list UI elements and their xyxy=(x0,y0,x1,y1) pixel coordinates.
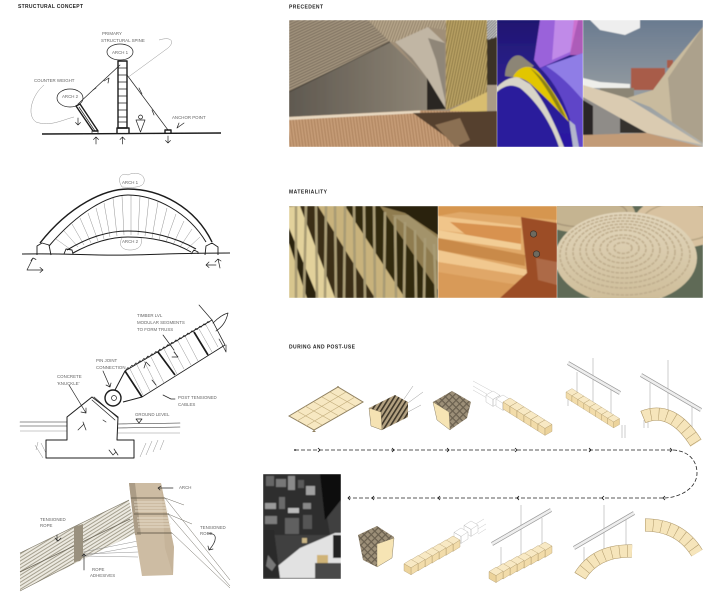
label: tensioned rope right: ROPE xyxy=(200,531,213,536)
label: concrete knuckle xyxy=(57,374,82,386)
label: counterweight xyxy=(31,78,75,124)
pin joint xyxy=(105,371,142,406)
label: ground level: GROUND LEVEL xyxy=(135,412,170,417)
photo: woven rope pavilion xyxy=(289,20,497,147)
arrows xyxy=(69,335,178,413)
person xyxy=(136,115,145,132)
label: counterweight: COUNTER WEIGHT xyxy=(34,78,75,83)
module: timber rope cube xyxy=(433,391,471,430)
label: concrete knuckle: 'KNUCKLE' xyxy=(57,381,80,386)
arch 2 xyxy=(67,231,196,250)
label: tensioned rope right xyxy=(200,525,226,536)
label: arch: ARCH xyxy=(179,485,191,490)
photo: laneway in black and white xyxy=(263,474,341,579)
dashed path: return curve xyxy=(663,450,697,498)
force arrows xyxy=(76,78,184,144)
arch block xyxy=(129,483,174,576)
rope adhesive band xyxy=(74,524,83,562)
label: tensioned rope right: TENSIONED xyxy=(200,525,226,530)
module: hung straight beam with rail xyxy=(566,358,625,438)
module: hung curved arch with rail xyxy=(641,360,701,443)
label: post tensioned cables: CABLES xyxy=(178,402,195,407)
rope bundle beam xyxy=(20,500,136,591)
arch 2 callout xyxy=(57,89,83,107)
label: pin joint connection: CONNECTION xyxy=(96,365,126,370)
arch 1 callout xyxy=(120,173,144,187)
label: timber lvl modular segments xyxy=(137,313,185,332)
label: timber lvl modular segments: TO FORM TRUSS xyxy=(137,327,173,332)
bearing plate xyxy=(92,397,118,420)
concrete knuckle foundation xyxy=(46,397,134,458)
counterweight arch xyxy=(76,104,98,134)
module: rope cube xyxy=(358,526,394,567)
loose ropes under beam xyxy=(83,541,138,557)
label: primary structural spine: PRIMARY xyxy=(102,31,122,36)
tension cables xyxy=(165,498,230,588)
photo: fabric canopy against sky xyxy=(583,20,703,147)
ground line xyxy=(42,133,221,134)
label: concrete knuckle: CONCRETE xyxy=(57,374,82,379)
beam end xyxy=(199,305,228,352)
label: pin joint connection: PIN JOINT xyxy=(96,358,118,363)
label: post tensioned cables xyxy=(178,395,217,407)
arch 2 callout: ARCH 2 xyxy=(62,94,79,99)
label: timber lvl modular segments: MODULAR SEGMENTS xyxy=(137,320,185,325)
sketch: structural concept section xyxy=(31,31,221,144)
dashed path: bottom row xyxy=(348,496,665,500)
module: flat timber sheet xyxy=(289,386,363,432)
label: tensioned rope left xyxy=(40,517,66,528)
cables xyxy=(78,65,168,130)
anchor block xyxy=(165,130,171,133)
heading: materiality: MATERIALITY xyxy=(289,190,328,196)
label: primary structural spine: STRUCTURAL SPINE xyxy=(101,38,145,43)
annotation arrows xyxy=(55,486,215,570)
sketch: pin joint detail xyxy=(20,305,228,458)
sketch: double arch elevation xyxy=(22,173,230,272)
label: rope adhesives xyxy=(90,567,115,578)
diagram row: reuse sequence xyxy=(358,505,697,583)
arch 1 inner edge xyxy=(49,195,206,246)
heading: precedent: PRECEDENT xyxy=(289,4,323,10)
heading: during and post-use: DURING AND POST-USE xyxy=(289,344,356,350)
heading: structural concept: STRUCTURAL CONCEPT xyxy=(18,4,83,10)
module: beam with wireframe xyxy=(404,519,486,575)
photo: coiled rope cushions xyxy=(557,206,703,298)
icon: steel bolts xyxy=(530,231,540,257)
module: hung beam with rail xyxy=(489,505,552,583)
label: post tensioned cables: POST TENSIONED xyxy=(178,395,217,400)
module: free standing arch xyxy=(645,525,697,553)
label: tensioned rope left: ROPE xyxy=(40,523,53,528)
arch 1 callout: ARCH 1 xyxy=(122,180,139,185)
label: timber lvl modular segments: TIMBER LVL xyxy=(137,313,163,318)
ground xyxy=(22,253,230,255)
ground strata xyxy=(20,422,180,428)
photo: iris flower xyxy=(497,20,583,147)
module: hung arch with rail xyxy=(574,505,634,576)
label: rope adhesives: ROPE xyxy=(92,567,105,572)
force arrows left xyxy=(27,258,43,272)
label: pin joint connection xyxy=(96,358,126,370)
primary arch tower xyxy=(117,61,129,134)
arch 2 inner edge xyxy=(73,237,191,253)
label: tensioned rope left: TENSIONED xyxy=(40,517,66,522)
arch 1 xyxy=(40,189,212,243)
label: primary structural spine xyxy=(101,31,172,78)
label: ground level xyxy=(135,412,170,423)
arch 1 callout: ARCH 1 xyxy=(112,50,129,55)
photo: rope strands xyxy=(289,206,438,298)
arch 1 callout xyxy=(107,44,133,60)
suspension ropes xyxy=(56,195,200,249)
label: anchor point: ANCHOR POINT xyxy=(172,115,206,120)
label: rope adhesives: ADHESIVES xyxy=(90,573,115,578)
module: assembled beam with wireframe xyxy=(473,381,552,435)
timber truss beam xyxy=(125,320,225,397)
photo: timber and steel plate xyxy=(438,206,557,298)
force arrows right xyxy=(206,259,221,268)
dashed path: top row xyxy=(294,448,673,452)
model: tensioned rope arch connection xyxy=(20,483,230,591)
footings xyxy=(37,243,218,255)
arch 2 callout xyxy=(120,238,141,250)
module: notched rope section xyxy=(369,386,423,430)
arch 2 callout: ARCH 2 xyxy=(122,239,139,244)
diagram row: assembly sequence xyxy=(289,358,701,443)
